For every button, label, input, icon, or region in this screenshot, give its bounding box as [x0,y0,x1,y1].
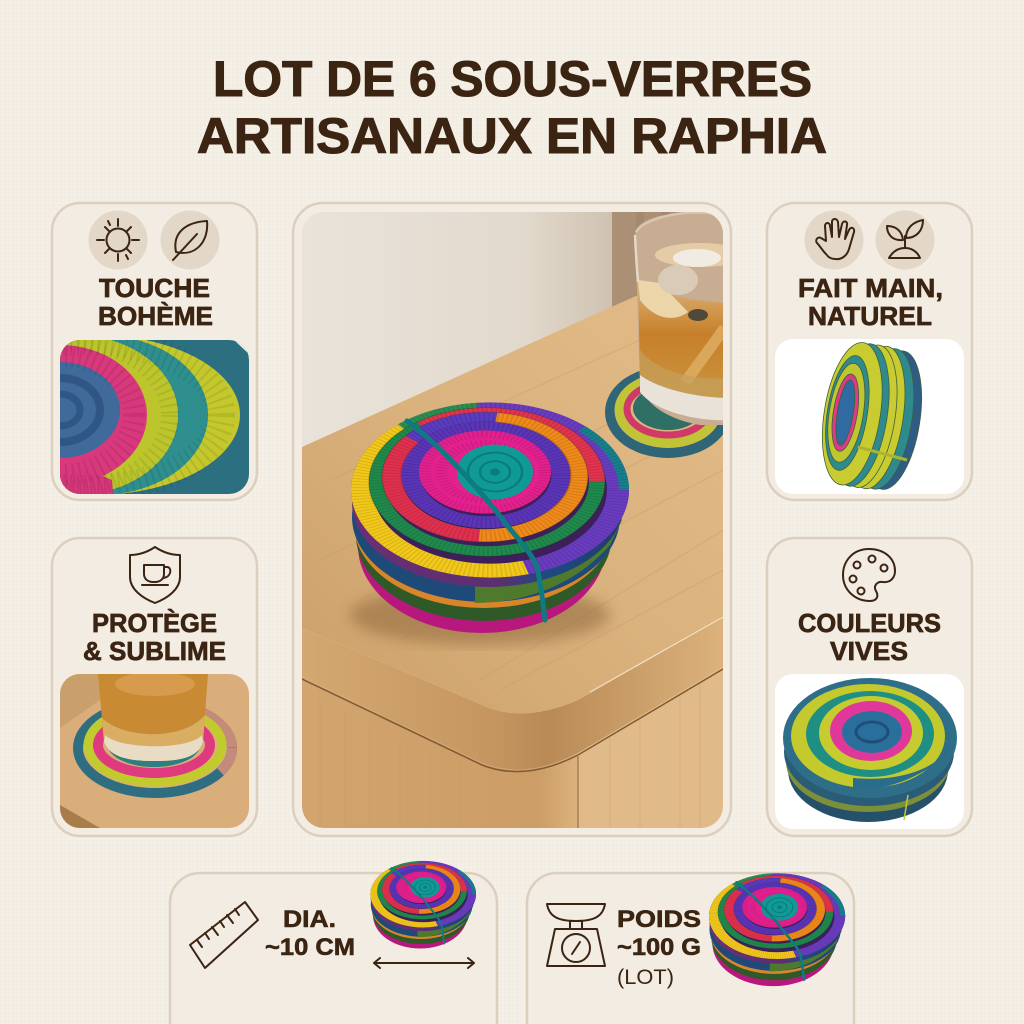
text: weight: POIDS [617,906,701,933]
glass of iced tea [634,212,723,425]
icon: kitchen scale [547,904,605,966]
photo: coaster stack on wood cabinet [302,212,745,828]
icon: sun [88,210,148,270]
image: coasters top view [775,674,964,829]
text: weight: (LOT) [617,966,674,989]
panel: diameter [170,861,497,1024]
panel: weight [527,873,854,1024]
heading: touche bohème: BOHÈME [98,301,213,331]
text: diameter: ~10 CM [265,934,355,961]
heading: couleurs vives: COULEURS [798,608,941,638]
title: LOT DE 6 SOUS-VERRES [213,51,812,107]
heading: couleurs vives: VIVES [830,636,908,666]
icon: ruler [190,902,258,968]
heading: touche bohème: TOUCHE [99,273,210,303]
icon: hand [804,210,864,270]
text: diameter [265,906,355,961]
heading: touche bohème [98,273,213,331]
panel: protège & sublime [52,538,257,836]
title [197,51,827,164]
panel: touche bohème [50,202,258,502]
text: diameter: DIA. [283,906,336,933]
arrow: width [374,958,474,968]
heading: fait main, naturel [798,273,943,331]
small coaster under glass [610,371,726,453]
coaster stack [351,403,629,633]
icon: leaf [160,210,220,270]
icon: sprout [876,210,934,270]
title: ARTISANAUX EN RAPHIA [197,108,827,164]
text: weight [617,906,701,989]
image: coasters side view [775,338,964,495]
image: small coaster stack [370,861,476,949]
image: raffia close-up [60,340,249,494]
icon: palette [843,549,895,601]
heading: protège & sublime: & SUBLIME [83,636,226,666]
heading: couleurs vives [798,608,941,666]
panel: couleurs vives [767,538,972,836]
image: glass on coaster [60,672,249,828]
panel: main photo [293,203,745,836]
icon: shield with cup [130,547,180,603]
heading: protège & sublime: PROTÈGE [92,608,217,638]
heading: protège & sublime [83,608,226,666]
shadow under stack [350,585,610,645]
panel: fait main, naturel [767,203,972,500]
heading: fait main, naturel: FAIT MAIN, [798,273,943,303]
heading: fait main, naturel: NATUREL [808,301,932,331]
image: coaster stack [709,873,845,986]
text: weight: ~100 G [617,934,701,961]
